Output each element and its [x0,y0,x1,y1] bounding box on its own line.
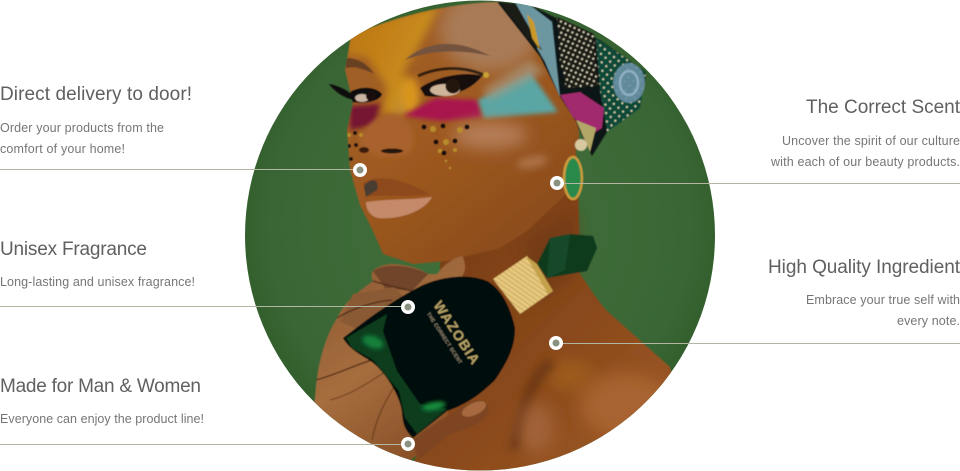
leader line and marker [550,176,960,190]
heading: The Correct Scent [806,97,960,118]
heading: Direct delivery to door! [0,84,192,105]
description: comfort of your home! [0,142,125,156]
green backdrop [245,0,715,471]
forehead skin [440,0,540,72]
perfume bottle [343,277,515,438]
makeup: magenta [403,98,482,121]
leader line and marker [0,163,367,177]
description: Long-lasting and unisex fragrance! [0,275,195,289]
bottle label: WAZOBIA [430,298,483,367]
face jewels [347,124,470,169]
bottle label: THE CORRECT SCENT [425,312,463,365]
hand [314,256,466,460]
description: Everyone can enjoy the product line! [0,412,204,426]
description: Order your products from the [0,121,164,135]
callout: Unisex Fragrance [0,239,415,314]
description: Uncover the spirit of our culture [782,134,960,148]
description [770,134,960,169]
makeup: orange [345,5,440,115]
description [806,293,960,328]
eyebrow [405,44,490,60]
right eye [418,68,489,97]
lips [363,178,432,218]
bottle stopper [526,234,597,294]
description: with each of our beauty products. [770,155,960,169]
nose [362,114,410,154]
heading: High Quality Ingredient [768,257,960,278]
left eyelashes [329,84,356,100]
bottle collar rope [493,256,553,314]
callout: The Correct Scent [550,97,960,190]
photo circle: model holding perfume [245,0,715,471]
leader line and marker [549,336,960,350]
head wrap [497,2,646,156]
description: every note. [897,314,960,328]
earring [564,139,587,199]
face [340,0,585,270]
neck and shoulder [414,194,672,470]
green glass wing [346,314,447,434]
left eye [350,88,382,103]
heading: Made for Man & Women [0,376,201,397]
heading: Unisex Fragrance [0,239,147,260]
callout: Made for Man & Women [0,376,415,451]
cheek highlight [452,121,528,149]
leader line and marker [0,300,415,314]
makeup: teal [478,72,558,118]
thumb [413,398,489,460]
leader line and marker [0,437,415,451]
callout: High Quality Ingredient [549,257,960,350]
description: Embrace your true self with [806,293,960,307]
callout: Direct delivery to door [0,84,367,177]
description [0,121,164,156]
